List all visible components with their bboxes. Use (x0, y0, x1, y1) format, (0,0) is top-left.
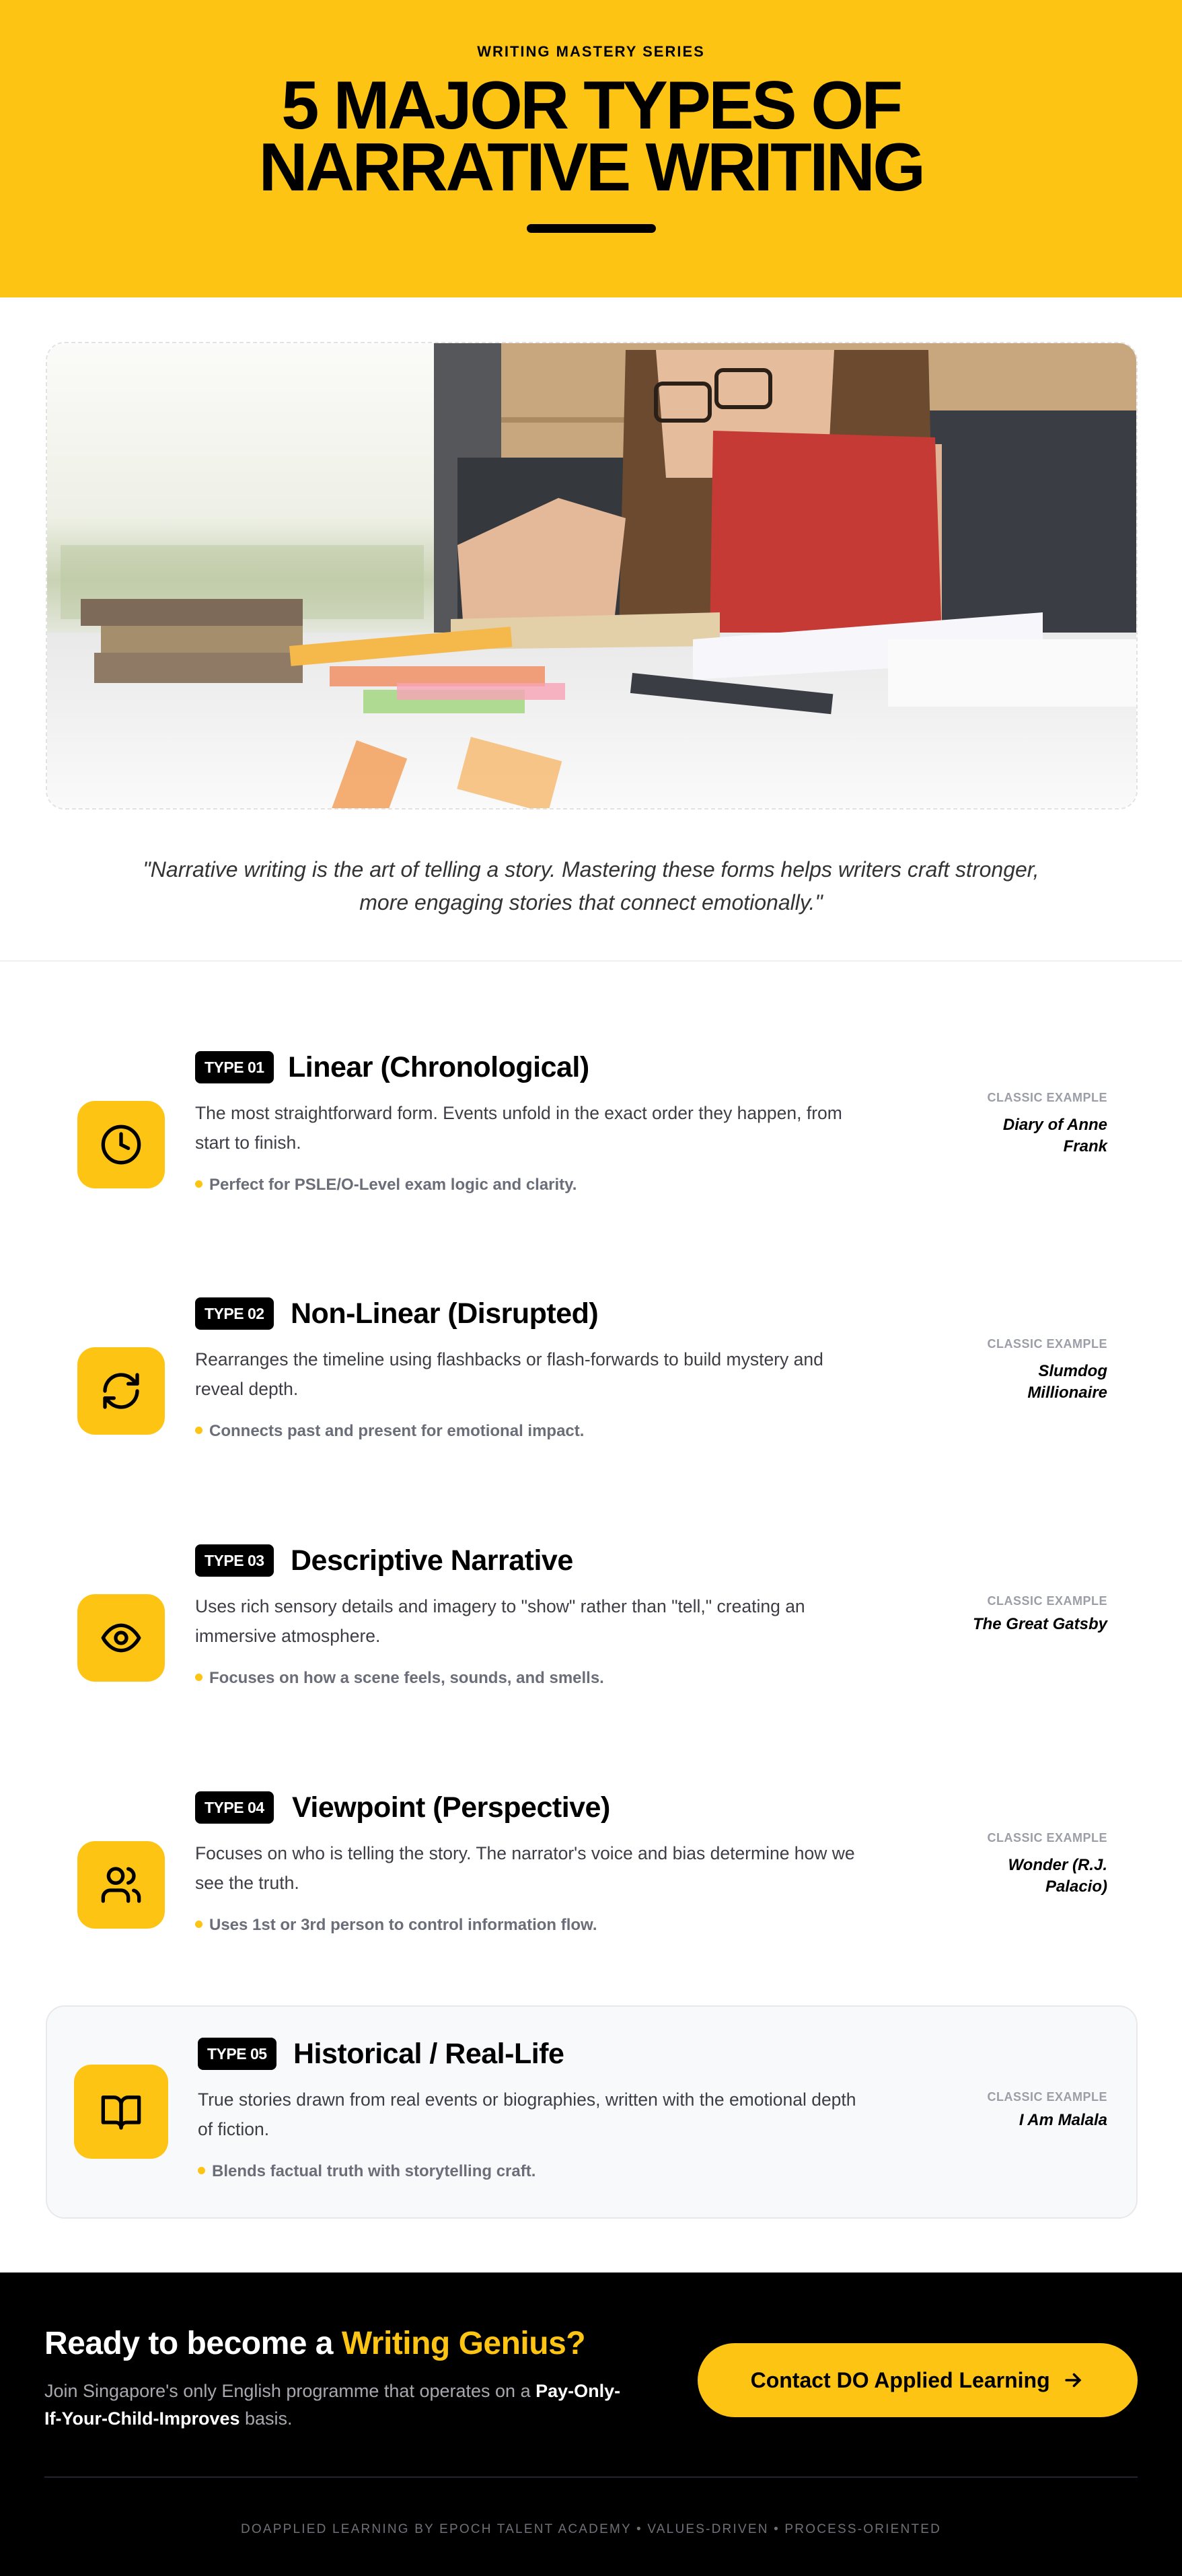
example (987, 1337, 1107, 1402)
example: CLASSIC EXAMPLE (987, 1337, 1107, 1351)
title (259, 68, 923, 205)
CTA text: Join Singapore's only English programme that operates on a Pay-Only-If-Your-Child-Improves basis. (44, 2381, 620, 2429)
header band (0, 0, 1182, 297)
bullet: Uses 1st or 3rd person to control information flow. (209, 1916, 597, 1934)
hero photo (46, 342, 1138, 810)
panel: type 01 (77, 1051, 1108, 1194)
badge: TYPE 04 (205, 1799, 264, 1816)
CTA heading: Ready to become a Writing Genius? (44, 2326, 585, 2361)
panel: type 04 (77, 1791, 1107, 1934)
badge: TYPE 05 (207, 2045, 267, 2063)
icon: book (74, 2065, 168, 2159)
example: Palacio) (1045, 1877, 1107, 1896)
description: Focuses on who is telling the story. The narrator's voice and bias determine how we see the truth. (195, 1843, 855, 1893)
footer CTA (0, 2273, 1182, 2576)
example (987, 1091, 1108, 1155)
example (987, 1831, 1107, 1896)
example: Slumdog (1038, 1362, 1107, 1380)
example (987, 2090, 1107, 2129)
badge: TYPE 01 (205, 1059, 264, 1076)
heading: Historical / Real-Life (293, 2038, 564, 2070)
badge: TYPE 03 (205, 1552, 264, 1569)
panel: type 03 (77, 1544, 1108, 1687)
example: Millionaire (1027, 1384, 1107, 1402)
heading: Linear (Chronological) (288, 1051, 589, 1083)
CTA button (698, 2343, 1138, 2417)
example: I Am Malala (1019, 2111, 1107, 2129)
kicker text: WRITING MASTERY SERIES (477, 43, 705, 60)
title: NARRATIVE WRITING (259, 130, 923, 205)
icon: clock (77, 1101, 165, 1188)
badge: TYPE 02 (205, 1305, 264, 1322)
footer note: DOAPPLIED LEARNING BY EPOCH TALENT ACADEMY • VALUES-DRIVEN • PROCESS-ORIENTED (241, 2522, 941, 2536)
bullet: Connects past and present for emotional impact. (209, 1422, 584, 1440)
bullet: Blends factual truth with storytelling craft. (212, 2162, 535, 2180)
heading: Descriptive Narrative (291, 1544, 573, 1577)
description: The most straightforward form. Events unfold in the exact order they happen, from start to finish. (195, 1103, 842, 1153)
badge (195, 1544, 274, 1577)
badge (195, 1051, 274, 1083)
example: Wonder (R.J. (1008, 1856, 1107, 1874)
example: Frank (1064, 1137, 1107, 1155)
example (973, 1594, 1108, 1633)
title: 5 MAJOR TYPES OF (281, 68, 901, 143)
badge (195, 1297, 274, 1330)
example: CLASSIC EXAMPLE (987, 1091, 1107, 1104)
panel: type 05 card (46, 2005, 1138, 2219)
icon: eye (77, 1594, 165, 1682)
badge (195, 1791, 274, 1824)
description: Rearranges the timeline using flashbacks or flash-forwards to build mystery and reveal depth. (195, 1349, 823, 1399)
icon: users (77, 1841, 165, 1929)
example: CLASSIC EXAMPLE (987, 2090, 1107, 2104)
CTA button: Contact DO Applied Learning (751, 2367, 1050, 2392)
title underline (527, 224, 656, 233)
heading: Non-Linear (Disrupted) (291, 1297, 598, 1330)
panel: type 02 (77, 1297, 1107, 1440)
example: CLASSIC EXAMPLE (987, 1594, 1107, 1608)
icon: refresh (77, 1347, 165, 1435)
bullet: Perfect for PSLE/O-Level exam logic and clarity. (209, 1176, 577, 1194)
description: True stories drawn from real events or biographies, written with the emotional depth of fiction. (198, 2089, 856, 2139)
example: CLASSIC EXAMPLE (987, 1831, 1107, 1845)
badge (198, 2038, 276, 2070)
example: The Great Gatsby (973, 1615, 1107, 1633)
example: Diary of Anne (1003, 1116, 1107, 1134)
quote: "Narrative writing is the art of telling a story. Mastering these forms helps writers craft stronger, more engaging stories that connect emotionally." (143, 857, 1039, 915)
bullet: Focuses on how a scene feels, sounds, and smells. (209, 1669, 604, 1687)
heading: Viewpoint (Perspective) (292, 1791, 610, 1824)
description: Uses rich sensory details and imagery to "show" rather than "tell," creating an immersive atmosphere. (195, 1596, 805, 1646)
